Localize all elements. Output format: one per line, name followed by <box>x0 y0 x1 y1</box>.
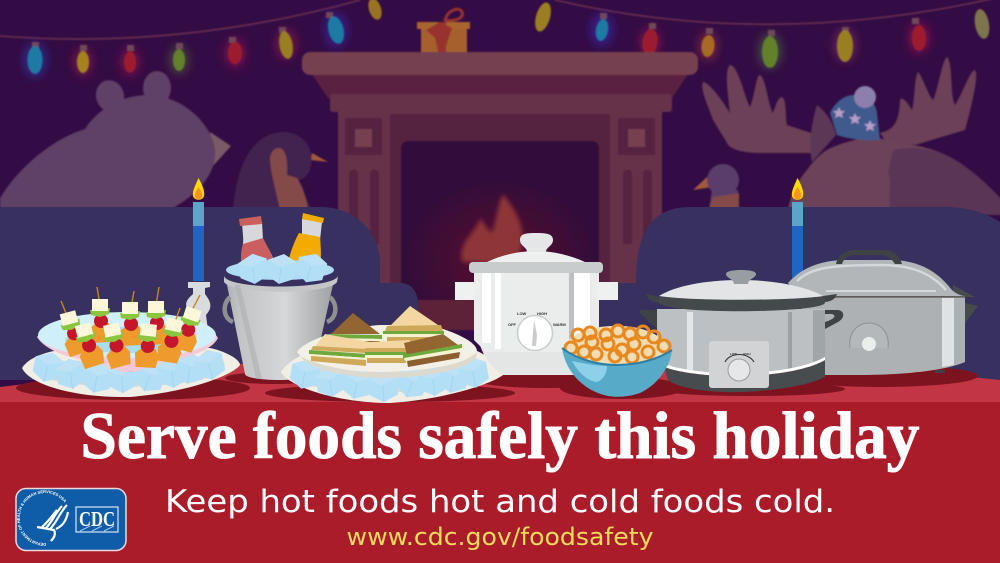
penguin <box>233 132 328 210</box>
roaster oven <box>788 250 978 375</box>
string lights <box>0 0 1000 77</box>
dial: OFF <box>508 322 517 327</box>
CDC logo <box>15 488 127 552</box>
hat <box>830 86 880 140</box>
dial <box>850 323 888 351</box>
subtitle: Keep hot foods hot and cold foods cold. <box>165 484 835 520</box>
website url: www.cdc.gov/foodsafety <box>346 523 654 551</box>
bowl of pretzels <box>562 325 672 397</box>
grey slow cooker <box>640 270 843 392</box>
control panel <box>709 341 769 388</box>
plate with appetizers <box>22 287 240 397</box>
ice cubes <box>31 346 228 396</box>
ice cubes <box>288 355 491 403</box>
CDC logo: CDC <box>79 507 115 531</box>
ice bucket with bottles <box>224 213 338 380</box>
dial: WARM <box>553 322 566 327</box>
left antler <box>702 65 817 153</box>
control panel: HIGH <box>743 352 750 356</box>
sandwich: front middle <box>365 348 408 363</box>
fireplace <box>302 9 698 330</box>
flame <box>193 178 204 200</box>
white slow cooker <box>455 233 618 375</box>
polar bear <box>0 71 231 212</box>
duck <box>693 164 739 215</box>
sandwich: back dark <box>329 313 382 345</box>
fire <box>461 194 523 264</box>
shadows <box>16 365 978 402</box>
gift <box>417 9 470 52</box>
orange bottle <box>288 213 324 265</box>
sandwich: front left <box>309 346 368 366</box>
sofa left <box>0 207 418 380</box>
red bottle <box>239 216 275 275</box>
plate with sandwiches <box>281 306 503 403</box>
left candle <box>186 178 210 330</box>
sofa right <box>600 207 1000 390</box>
dial: LOW <box>517 311 527 316</box>
moose <box>702 57 1000 215</box>
blurred background scene <box>0 0 1000 330</box>
CDC logo: DEPARTMENT OF HEALTH & HUMAN SERVICES USA <box>17 490 66 546</box>
right antler <box>880 57 976 145</box>
right candle <box>792 178 803 286</box>
dial <box>508 311 566 350</box>
pale bread under front sandwiches <box>316 334 410 350</box>
table <box>0 354 1000 563</box>
sandwich: front right <box>403 334 462 367</box>
sandwich: back light <box>383 306 444 343</box>
control panel: LOW <box>730 352 737 356</box>
dial: HIGH <box>537 311 547 316</box>
skewers <box>57 287 206 370</box>
title: Serve foods safely this holiday <box>80 399 920 473</box>
